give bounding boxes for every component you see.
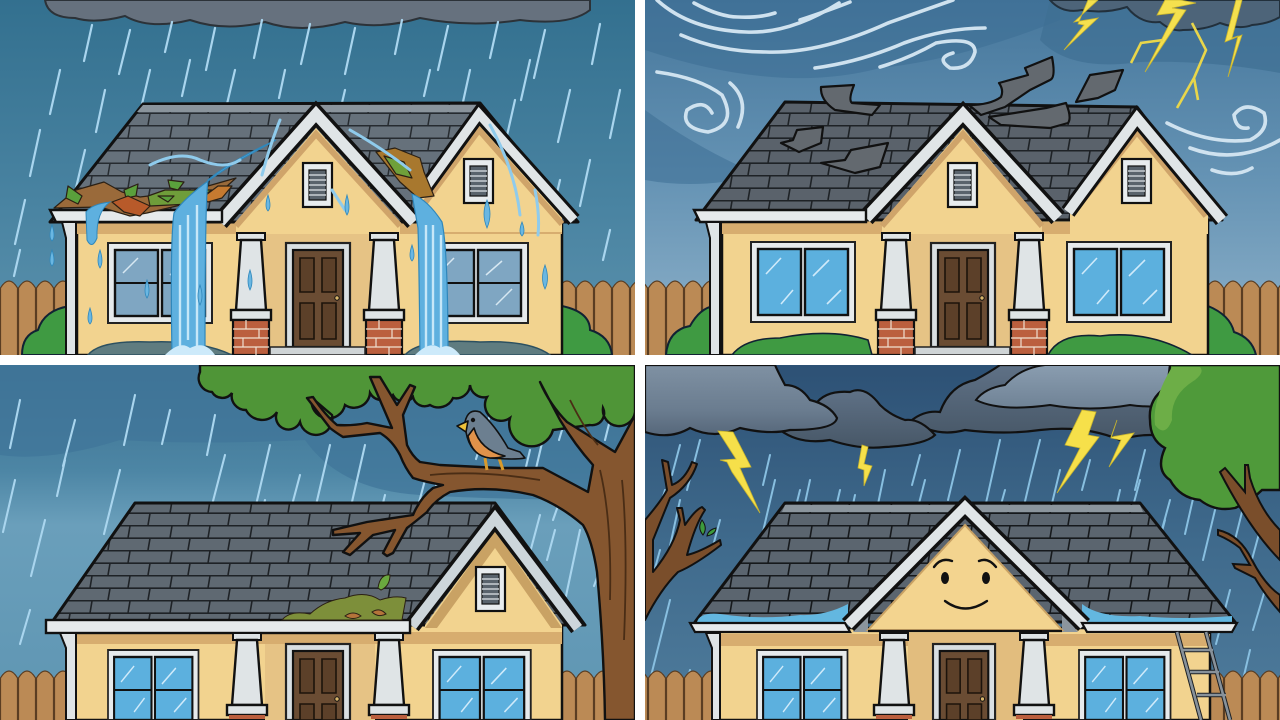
right column [1009, 233, 1049, 355]
smiling face [934, 560, 996, 608]
cloud band [0, 365, 635, 500]
door [286, 243, 350, 347]
rain [3, 395, 610, 644]
gutter debris right [376, 148, 434, 198]
rain [649, 440, 1265, 684]
left waterfall [171, 140, 276, 355]
roof debris [282, 575, 406, 620]
gable trim [412, 518, 578, 628]
lightning forks [1131, 23, 1206, 108]
right column [369, 633, 409, 719]
front gable wall [236, 128, 400, 234]
right window [433, 650, 531, 720]
rain [14, 20, 620, 276]
dormer vent [1122, 159, 1151, 203]
gutter [50, 210, 222, 222]
front gable shade [882, 134, 1042, 226]
storm cloud light [976, 365, 1172, 408]
porch recess [265, 644, 375, 720]
splash [165, 345, 460, 355]
dark cloud backdrop [1040, 16, 1280, 73]
house wall [718, 628, 1210, 720]
panel: wind lifting shingles [645, 0, 1280, 355]
downspout [60, 633, 76, 720]
gable wall [868, 525, 1062, 630]
gable vent [476, 567, 505, 611]
roof [50, 503, 585, 625]
step [270, 347, 365, 355]
canopy highlight [1155, 367, 1202, 430]
right column [1014, 633, 1054, 719]
wind swirls [657, 0, 1280, 174]
right gable trim [1068, 118, 1222, 220]
roof [50, 103, 578, 222]
storm clouds right [912, 365, 1180, 440]
right gable shade [424, 130, 562, 224]
left column [874, 633, 914, 719]
tree canopy right [1150, 365, 1280, 509]
right column [364, 233, 404, 355]
right gable shade [1072, 132, 1206, 216]
water droplets [50, 195, 548, 324]
panel: healthy roof with ladder in storm [645, 365, 1280, 720]
downspout [706, 633, 720, 720]
roof [695, 503, 1235, 622]
storm cloud middle [780, 390, 935, 448]
ladder [1177, 632, 1230, 720]
roof [696, 102, 1222, 220]
step [915, 347, 1010, 355]
muddy puddles [88, 341, 550, 355]
bushes [666, 306, 1256, 355]
tree canopy [199, 365, 635, 446]
gutter [46, 620, 410, 633]
front gable trim [220, 114, 414, 222]
fence [645, 280, 1280, 355]
eave shadow [718, 634, 1210, 646]
left column [227, 633, 267, 719]
roof ridge highlight [137, 105, 486, 112]
front gable trim [866, 114, 1058, 218]
sky [645, 0, 1280, 288]
storm cloud [1050, 0, 1280, 30]
house wall [72, 625, 562, 720]
door [931, 243, 995, 347]
left window [108, 243, 212, 323]
left column [876, 233, 916, 355]
gutter overflow left [86, 202, 110, 245]
gable vent [948, 163, 977, 207]
left window [108, 650, 198, 720]
downspout [706, 222, 720, 355]
gable vent [303, 163, 332, 207]
right waterfall [412, 194, 448, 355]
downspout [62, 222, 76, 355]
fence [645, 670, 1280, 720]
gable trim [848, 507, 1084, 625]
front gable shade [236, 134, 400, 226]
soffit triangles [853, 612, 1078, 632]
lightning bolts [718, 410, 1134, 513]
panel: clogged gutter overflowing in rain [0, 0, 635, 355]
dark wind bands [645, 24, 1044, 184]
fence [0, 280, 635, 355]
storm cloud [45, 0, 590, 28]
gutter right [1082, 623, 1237, 632]
panel: overhanging tree and roof debris [0, 365, 635, 720]
sky [0, 365, 635, 720]
shrubs [732, 333, 1192, 355]
right dormer wall [420, 125, 562, 232]
right window [1079, 650, 1171, 720]
lightning bolts [1064, 0, 1242, 77]
sky [645, 365, 1280, 720]
lifted shingles [781, 57, 1123, 173]
ridge band [782, 505, 1143, 512]
eave shadow [72, 632, 562, 644]
door [933, 644, 995, 720]
door [286, 644, 350, 720]
right gable wall [1070, 130, 1208, 234]
beam line [868, 630, 1062, 632]
front gable wall [882, 128, 1042, 234]
tree trunk right [1220, 465, 1280, 560]
right window [1067, 242, 1171, 322]
gable wall [425, 530, 562, 632]
porch recess [262, 234, 372, 346]
bushes [22, 306, 612, 355]
gutter debris left [54, 178, 236, 216]
gutter water [697, 604, 1232, 622]
porch recess [908, 234, 1018, 355]
storm cloud left [645, 365, 837, 435]
left window [757, 650, 847, 720]
fence [0, 670, 618, 720]
house wall [722, 215, 1208, 355]
eave shadow [77, 224, 562, 234]
gutter [694, 210, 866, 222]
dormer vent [464, 159, 493, 203]
sky [0, 0, 635, 288]
bare tree left [645, 460, 721, 620]
bark lines [430, 400, 626, 640]
right gable trim [424, 114, 574, 220]
right window [445, 242, 529, 324]
bird [457, 411, 525, 470]
porch recess [908, 633, 1023, 720]
left column [231, 233, 271, 355]
gable shade [425, 530, 562, 628]
roof streams [150, 120, 539, 235]
left window [751, 242, 855, 322]
house wall [77, 215, 562, 355]
small leaves [700, 520, 716, 536]
tree branch right [1218, 530, 1280, 612]
tree trunk and branches [307, 377, 635, 720]
eave shadow [722, 222, 1208, 234]
gutter left [690, 623, 850, 632]
